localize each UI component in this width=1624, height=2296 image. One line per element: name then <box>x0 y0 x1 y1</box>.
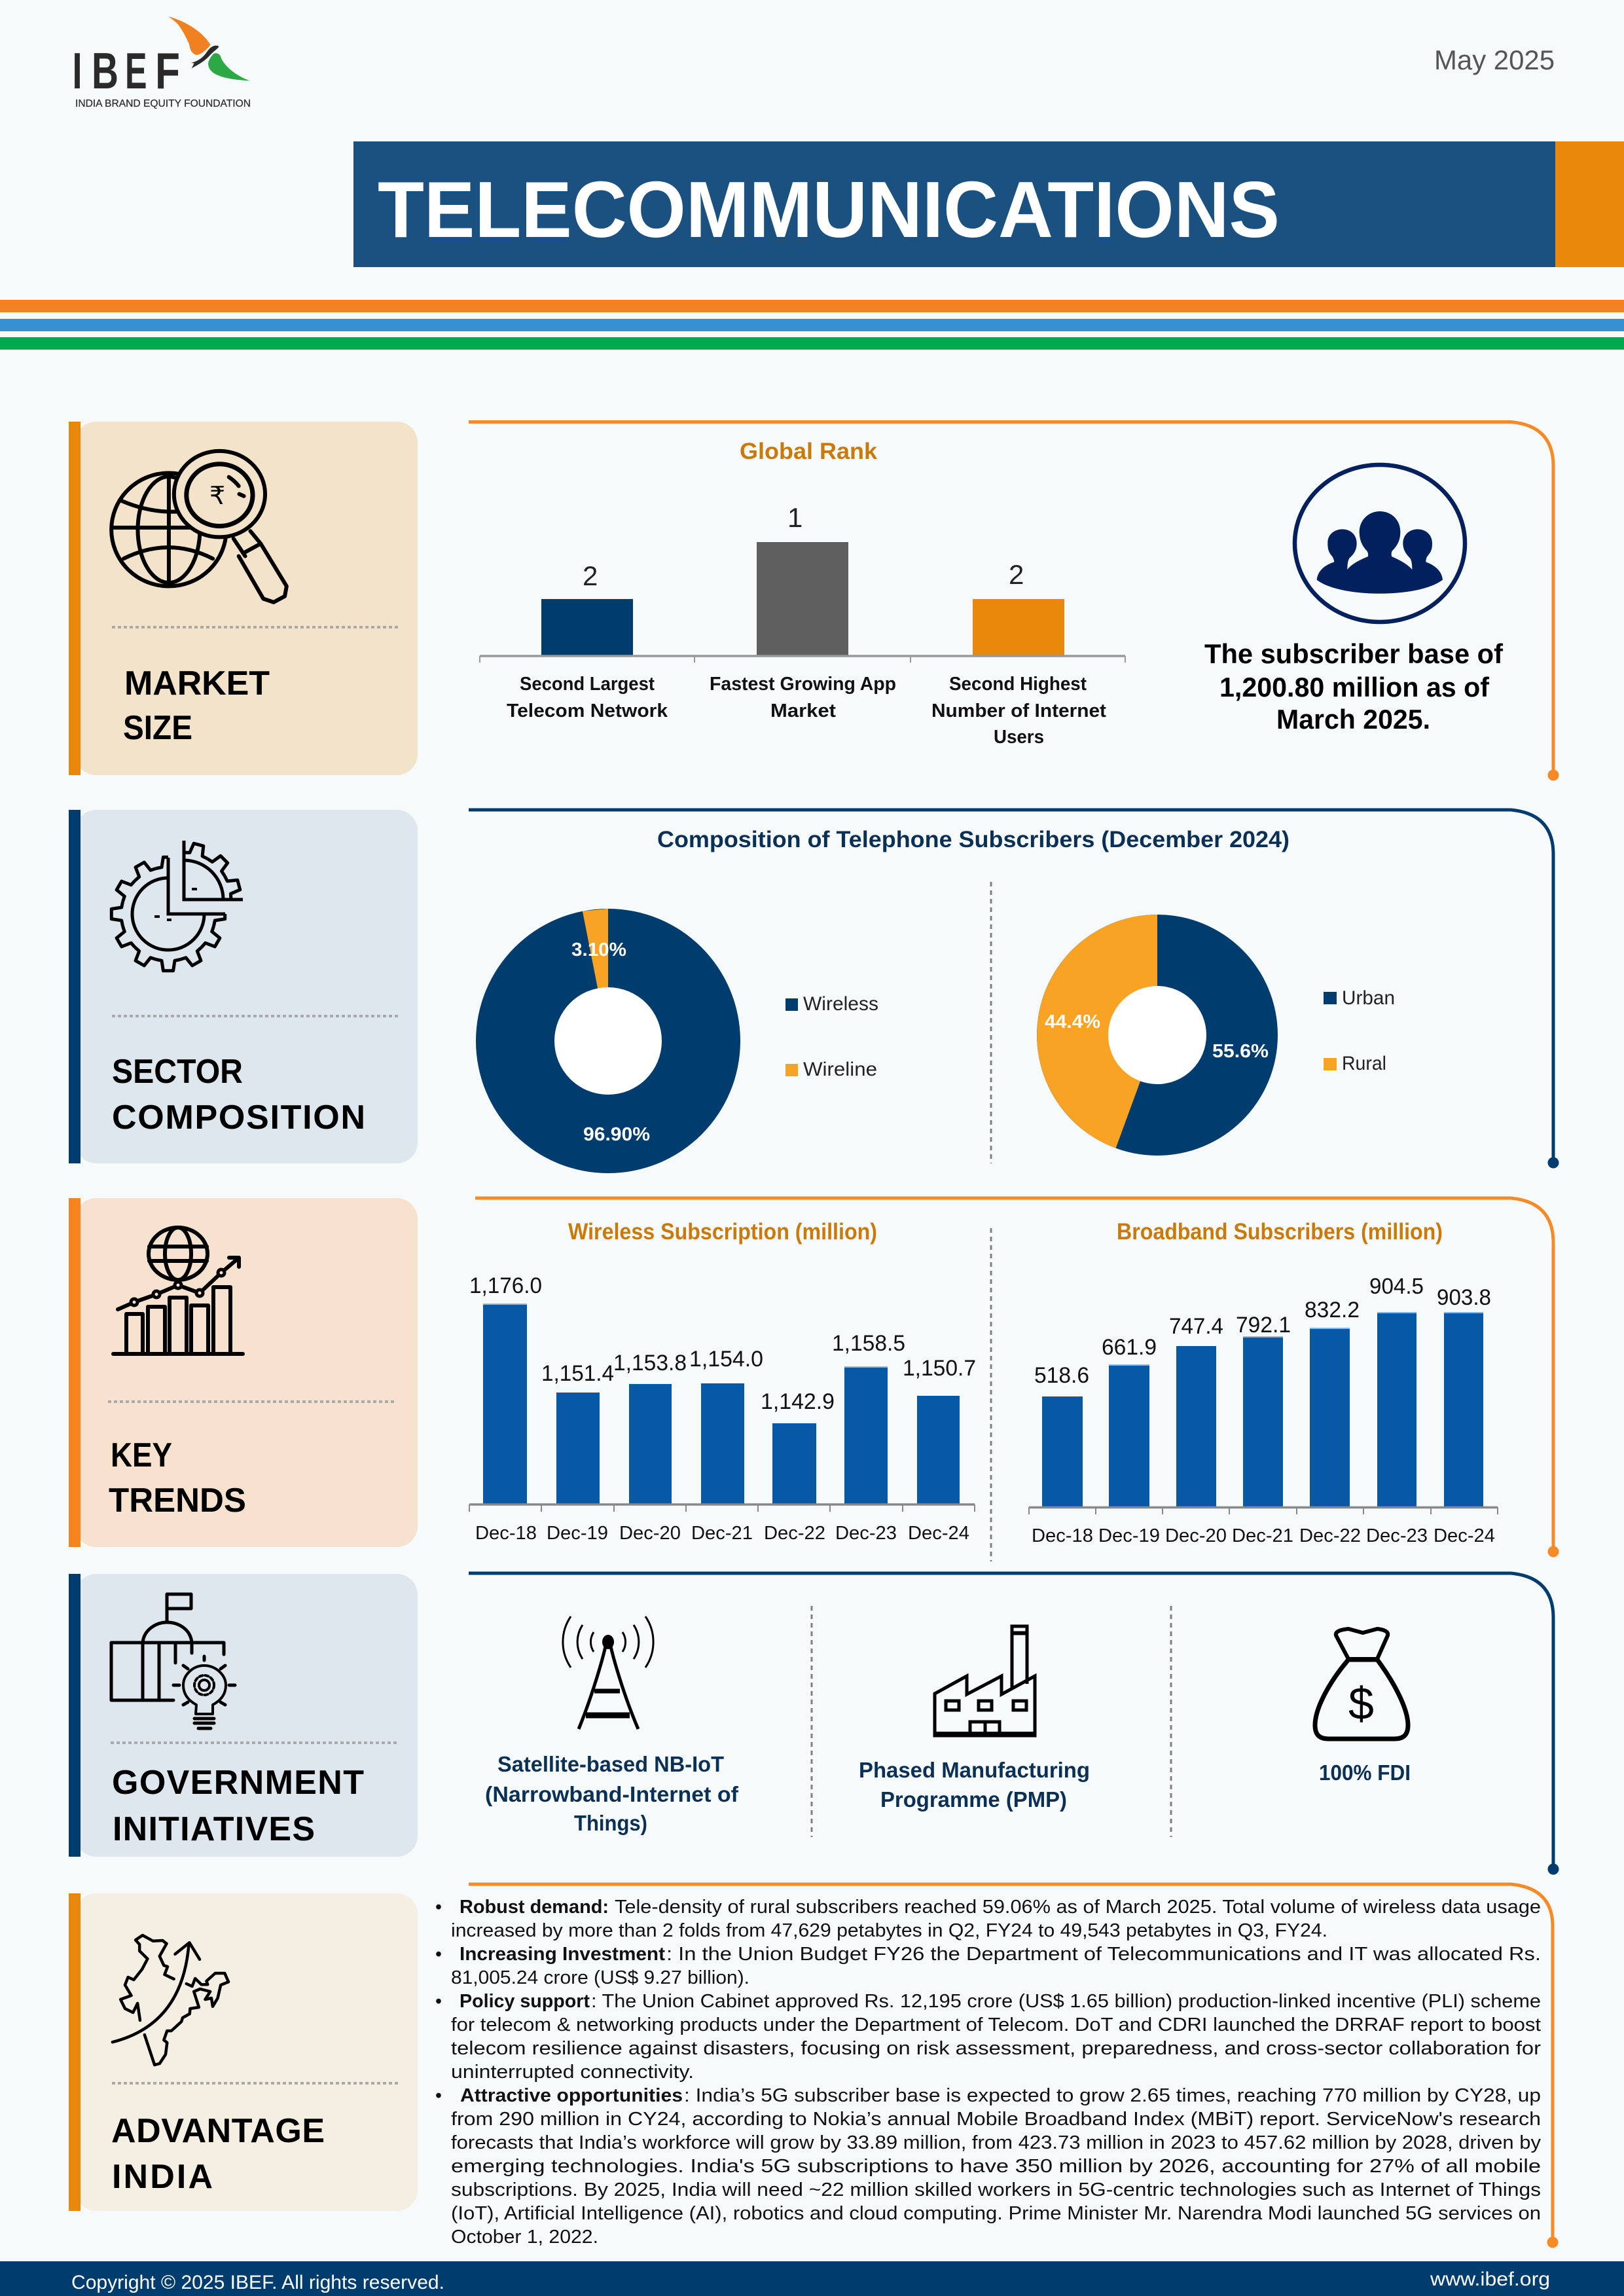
text block: attractive opportunities: emerging technologies. India's 5G subscriptions to have 350 million by 2026, accounting for 27% of all mobile <box>451 2156 1541 2177</box>
footer <box>0 2261 1624 2296</box>
legend: urban, rural <box>1324 987 1395 1074</box>
logo: IBEF: I <box>72 42 82 100</box>
text block: policy support: for telecom & networking products under the Department of Telecom. DoT and CDRI launched the DRRAF report to boost <box>451 2014 1541 2035</box>
text block: attractive opportunities: October 1, 2022. <box>451 2227 598 2248</box>
text block: robust demand <box>435 1897 1541 1941</box>
text: phased manufacturing <box>859 1758 1090 1812</box>
text block: robust demand: Robust demand: <box>460 1897 609 1918</box>
text block: attractive opportunities: subscriptions. By 2025, India will need ~22 million skilled workers in 5G-centric technologies such as Internet of Things <box>451 2179 1541 2200</box>
text block: policy support: Policy support <box>460 1991 590 2012</box>
text block: increasing investment: 81,005.24 crore (US$ 9.27 billion). <box>451 1967 749 1988</box>
text block: attractive opportunities: • <box>435 2085 442 2106</box>
heading: government initiatives: GOVERNMENT <box>112 1764 364 1802</box>
panel: market size label <box>69 422 418 775</box>
donut chart: urban vs rural: 44.4% <box>1045 1011 1100 1032</box>
heading: sector composition <box>112 1053 365 1137</box>
bar chart: broadband subscribers: 518.6 <box>1034 1363 1089 1388</box>
bar chart: wireless subscription: 1,176.0 <box>469 1273 542 1298</box>
bar chart: broadband subscribers: Dec-24 <box>1434 1525 1495 1546</box>
logo: IBEF <box>72 16 251 109</box>
logo: IBEF: INDIA BRAND EQUITY FOUNDATION <box>75 98 251 109</box>
bar chart: global rank <box>480 502 1125 748</box>
heading: key trends <box>109 1436 246 1520</box>
text block: increasing investment <box>435 1944 1541 1988</box>
title banner <box>353 141 1624 267</box>
text block: attractive opportunities: : India’s 5G subscriber base is expected to grow 2.65 times, reaching 770 million by CY28, up <box>684 2085 1541 2106</box>
footer: Copyright © 2025 IBEF. All rights reserved. <box>71 2272 444 2293</box>
text block: attractive opportunities: from 290 million in CY24, according to Nokia’s annual Mobile Broadband Index (MBiT) report. ServiceNow's research <box>451 2109 1541 2130</box>
panel: global rank and subscribers <box>469 422 1559 780</box>
icon: india map with arrow <box>113 1935 228 2065</box>
text: 100% FDI: 100% FDI <box>1319 1760 1411 1785</box>
logo: IBEF: B <box>92 42 118 100</box>
text block: attractive opportunities: (IoT), Artificial Intelligence (AI), robotics and cloud computing. Prime Minister Mr. Narendra Modi launched 5G services on <box>451 2203 1541 2224</box>
text block: attractive opportunities <box>435 2085 1542 2248</box>
text block: attractive opportunities: forecasts that India’s workforce will grow by 33.89 million, from 423.73 million in 2023 to 457.62 million by 2028, driven by <box>451 2132 1542 2153</box>
callout: subscriber base <box>1204 638 1504 735</box>
icon: globe and magnifier with rupee: ₹ <box>209 481 225 510</box>
heading: market size: MARKET <box>124 665 270 702</box>
icon: globe and magnifier with rupee <box>111 451 287 602</box>
heading: market size: SIZE <box>123 709 192 747</box>
bar chart: wireless subscription: Dec-24 <box>908 1523 969 1544</box>
text block: policy support: uninterrupted connectivity. <box>451 2062 694 2083</box>
bar chart: wireless subscription: Dec-21 <box>691 1523 753 1544</box>
bar chart: broadband subscribers: 792.1 <box>1236 1313 1291 1338</box>
donut chart: wireless vs wireline: 96.90% <box>583 1124 650 1145</box>
text block: policy support: : The Union Cabinet approved Rs. 12,195 crore (US$ 1.65 billion) production-linked incentive (PLI) scheme <box>591 1991 1541 2012</box>
bar chart: broadband subscribers <box>1029 1274 1498 1546</box>
text block: policy support: telecom resilience against disasters, focusing on risk assessment, preparedness, and cross-sector collaboration for <box>451 2038 1542 2059</box>
bar chart: broadband subscribers: Dec-19 <box>1098 1525 1160 1546</box>
heading: advantage india <box>111 2112 325 2196</box>
text: phased manufacturing: Programme (PMP) <box>880 1787 1067 1812</box>
text: satellite NB-IoT: (Narrowband-Internet of <box>485 1782 739 1806</box>
text block: attractive opportunities: Attractive opportunities <box>460 2085 683 2106</box>
bar chart: broadband subscribers: Dec-23 <box>1366 1525 1428 1546</box>
bar chart: broadband subscribers: Dec-22 <box>1299 1525 1361 1546</box>
date: May 2025 <box>1434 45 1555 75</box>
heading: sector composition: COMPOSITION <box>112 1099 365 1137</box>
heading: advantage india: INDIA <box>112 2158 213 2196</box>
bar chart: wireless subscription: 1,150.7 <box>903 1356 976 1381</box>
heading: broadband subscribers: Broadband Subscribers (million) <box>1117 1219 1443 1245</box>
heading: global rank: Global Rank <box>740 439 878 464</box>
text: satellite NB-IoT: Things) <box>574 1811 647 1835</box>
icon: money bag <box>1315 1629 1408 1739</box>
text block: increasing investment: : In the Union Budget FY26 the Department of Telecommunications and IT was allocated Rs. <box>666 1944 1541 1965</box>
legend: wireless, wireline: Wireline <box>803 1059 877 1080</box>
icon: factory <box>933 1626 1036 1736</box>
bar chart: wireless subscription: Dec-23 <box>835 1523 897 1544</box>
bar chart: broadband subscribers: 832.2 <box>1305 1298 1360 1322</box>
bar chart: wireless subscription: Dec-18 <box>475 1523 537 1544</box>
donut chart: wireless vs wireline <box>476 909 740 1173</box>
heading: advantage india: ADVANTAGE <box>111 2112 325 2150</box>
bar chart: broadband subscribers: Dec-20 <box>1165 1525 1227 1546</box>
icon: subscribers group <box>1295 465 1465 622</box>
bar chart: wireless subscription: 1,158.5 <box>832 1331 905 1356</box>
footer: www.ibef.org <box>1430 2269 1550 2290</box>
bar chart: global rank: Fastest Growing App <box>710 674 896 695</box>
heading: government initiatives: INITIATIVES <box>113 1810 315 1848</box>
panel: key trends label <box>69 1198 418 1547</box>
heading: composition: Composition of Telephone Subscribers (December 2024) <box>657 827 1290 852</box>
icon: money bag: $ <box>1348 1678 1374 1729</box>
panel: government initiatives label <box>69 1574 418 1857</box>
icon: globe over growing bar chart <box>113 1228 243 1354</box>
bar chart: global rank: Number of Internet <box>931 701 1106 721</box>
bar chart: wireless subscription <box>469 1273 976 1544</box>
bar chart: wireless subscription: 1,153.8 <box>613 1351 687 1376</box>
text: phased manufacturing: Phased Manufacturing <box>859 1758 1090 1782</box>
bar chart: global rank: 1 <box>787 502 803 533</box>
bar chart: broadband subscribers: 904.5 <box>1369 1274 1424 1299</box>
text block: robust demand: • <box>435 1897 442 1918</box>
heading: market size <box>123 665 270 747</box>
bar chart: wireless subscription: Dec-19 <box>547 1523 608 1544</box>
bar chart: global rank: Second Highest <box>949 674 1087 695</box>
heading: key trends: TRENDS <box>109 1482 246 1520</box>
bar chart: global rank: 2 <box>583 560 598 591</box>
text block: robust demand: Tele-density of rural subscribers reached 59.06% as of March 2025. Total volume of wireless data usage <box>615 1897 1541 1918</box>
text block: policy support: • <box>435 1991 442 2012</box>
legend: wireless, wireline: Wireless <box>803 993 878 1015</box>
icon: government building with light bulb <box>111 1594 235 1728</box>
icon: telecom tower <box>563 1616 653 1729</box>
logo: IBEF: E <box>125 42 147 100</box>
text: satellite NB-IoT <box>485 1752 739 1835</box>
text block: increasing investment: • <box>435 1944 442 1965</box>
bar chart: global rank: Users <box>994 727 1044 748</box>
bar chart: wireless subscription: Dec-22 <box>764 1523 825 1544</box>
callout: subscriber base: March 2025. <box>1276 704 1430 735</box>
panel: sector composition label <box>69 810 418 1163</box>
panel: advantage india text <box>435 1884 1558 2248</box>
icon: gear with pie wedge <box>111 841 243 971</box>
bar chart: broadband subscribers: Dec-18 <box>1032 1525 1093 1546</box>
bar chart: wireless subscription: 1,142.9 <box>761 1389 835 1414</box>
tricolour stripes <box>0 300 1624 350</box>
text block: increasing investment: Increasing Investment <box>460 1944 666 1965</box>
donut chart: urban vs rural <box>1037 915 1278 1156</box>
logo: IBEF: F <box>155 42 180 100</box>
text block: robust demand: increased by more than 2 folds from 47,629 petabytes in Q2, FY24 to 49,543 petabytes in Q3, FY24. <box>451 1920 1327 1941</box>
bar chart: broadband subscribers: 661.9 <box>1102 1335 1157 1360</box>
heading: sector composition: SECTOR <box>112 1053 243 1091</box>
legend: urban, rural: Urban <box>1342 987 1395 1009</box>
panel: government initiatives content <box>469 1573 1559 1875</box>
bar chart: wireless subscription: 1,154.0 <box>689 1347 763 1372</box>
callout: subscriber base: The subscriber base of <box>1204 638 1504 669</box>
bar chart: wireless subscription: 1,151.4 <box>541 1361 614 1386</box>
callout: subscriber base: 1,200.80 million as of <box>1219 672 1490 702</box>
heading: government initiatives <box>112 1764 364 1848</box>
bar chart: broadband subscribers: Dec-21 <box>1232 1525 1293 1546</box>
text: satellite NB-IoT: Satellite-based NB-IoT <box>497 1752 724 1776</box>
panel: key trends charts <box>469 1198 1559 1561</box>
legend: wireless, wireline <box>785 993 878 1080</box>
heading: key trends: KEY <box>111 1436 172 1474</box>
bar chart: global rank: Second Largest <box>520 674 655 695</box>
bar chart: broadband subscribers: 903.8 <box>1437 1285 1491 1310</box>
bar chart: global rank: Telecom Network <box>507 701 668 721</box>
heading: wireless subscription: Wireless Subscription (million) <box>568 1219 877 1245</box>
panel: telephone subscribers composition <box>469 810 1559 1173</box>
donut chart: urban vs rural: 55.6% <box>1212 1041 1269 1062</box>
bar chart: broadband subscribers: 747.4 <box>1169 1314 1223 1339</box>
panel: advantage india label <box>69 1893 418 2211</box>
bar chart: wireless subscription: Dec-20 <box>619 1523 681 1544</box>
bar chart: global rank: Market <box>770 701 836 721</box>
bar chart: global rank: 2 <box>1009 559 1024 590</box>
title banner: TELECOMMUNICATIONS <box>378 165 1280 254</box>
legend: urban, rural: Rural <box>1342 1053 1386 1074</box>
donut chart: wireless vs wireline: 3.10% <box>571 939 626 960</box>
text block: policy support <box>435 1991 1542 2083</box>
